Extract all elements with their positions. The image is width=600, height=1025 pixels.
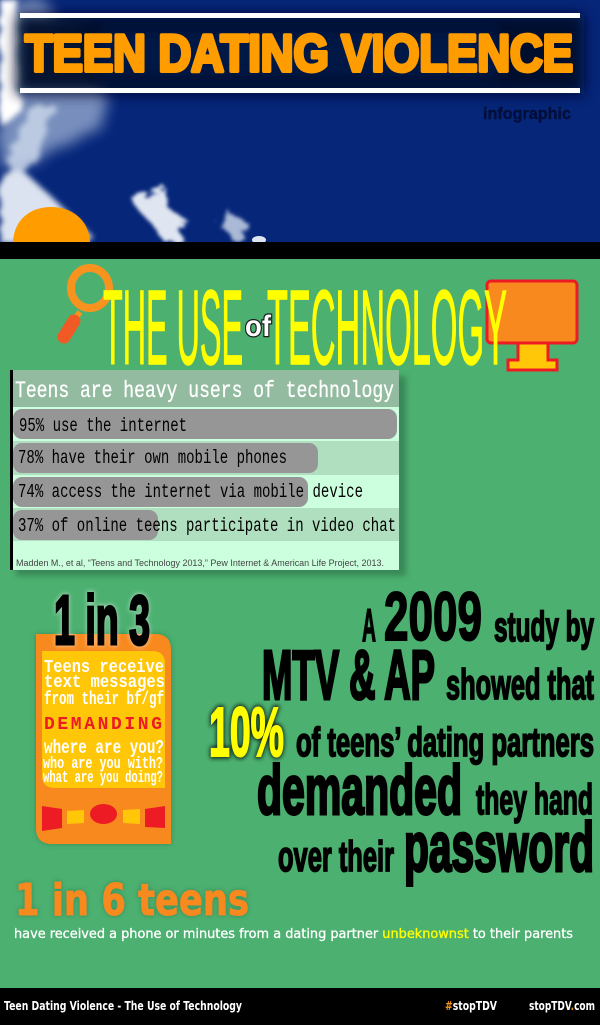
line: demanded they hand: demanded <box>257 751 462 829</box>
panel: technology usage table <box>10 370 406 576</box>
table axis <box>10 370 13 570</box>
line: over their password <box>278 808 594 886</box>
row: 95% use the internet: 95% use the internet <box>19 415 187 437</box>
phone body <box>36 634 171 844</box>
panel: green background <box>0 259 600 988</box>
panel: sky header <box>0 0 600 259</box>
line: A 2009 study by: 2009 <box>384 578 482 655</box>
caption: phone or minutes: have received a phone or minutes from a dating partner unbeknownst to their parents <box>14 927 573 942</box>
row: 74% access internet via mobile <box>13 477 363 507</box>
clouds <box>0 0 266 244</box>
row: 78% have mobile phones <box>13 441 399 475</box>
phone illustration <box>36 634 171 844</box>
stat: 1 in 3: 1 in 3 <box>54 581 150 659</box>
stat: 1 in 6 teens: 1 in 6 teens <box>15 875 249 926</box>
stat: 10%: 10% <box>209 693 284 771</box>
title shadow band <box>16 14 584 94</box>
footer title: Teen Dating Violence - The Use of Technology <box>4 998 242 1013</box>
footer hashtag: #stopTDV <box>445 998 497 1013</box>
row: 95% use the internet <box>13 409 397 439</box>
footer <box>0 988 600 1025</box>
line: A 2009 study by: A <box>362 599 376 651</box>
line: MTV & AP showed that: MTV & AP <box>262 636 435 714</box>
rule: top <box>20 13 580 18</box>
stat: 1 in 3 <box>54 581 150 659</box>
row: 74% access internet via mobile: 74% access the internet via mobile device <box>18 481 363 503</box>
table header: Teens are heavy users of technology <box>15 378 394 404</box>
icon: monitor <box>487 281 577 370</box>
stat: 10%: 10% <box>209 693 284 771</box>
study text block <box>209 578 594 886</box>
line: A 2009 study by <box>362 578 594 655</box>
stat: 1 in 3: 1 in 3 <box>54 581 150 659</box>
icon: magnifying glass <box>64 268 109 337</box>
phone text: what are you doing? <box>43 769 163 788</box>
phone text: DEMANDING <box>44 715 162 735</box>
heading: of: of <box>245 310 272 343</box>
rule: bottom <box>20 88 580 93</box>
source citation: Madden M., et al, “Teens and Technology 2013,” Pew Internet & American Life Project, 2013. <box>16 558 384 568</box>
phone screen <box>42 651 165 788</box>
phone text: who are you with? <box>43 755 163 774</box>
phone text <box>43 658 165 788</box>
row: 37% video chat: 37% of online teens participate in video chat <box>18 515 396 537</box>
phone text: Teens receive <box>44 658 164 678</box>
icon: sun <box>13 207 90 242</box>
row: 78% have mobile phones: 78% have their own mobile phones <box>18 447 287 469</box>
subtitle: infographic <box>483 104 571 123</box>
stat: 10% <box>209 693 284 771</box>
phone text: from their bf/gf <box>44 690 164 710</box>
horizon <box>0 242 600 259</box>
phone buttons <box>42 804 165 831</box>
table header <box>13 370 399 407</box>
phone text: where are you? <box>44 737 164 759</box>
line: over their password: over their <box>278 833 394 881</box>
stat: 1 in 6 teens: 1 in 6 teens <box>15 875 249 926</box>
heading: THE USE <box>103 269 243 387</box>
row: 37% video chat <box>13 508 399 541</box>
phone text: text messages <box>44 673 165 693</box>
